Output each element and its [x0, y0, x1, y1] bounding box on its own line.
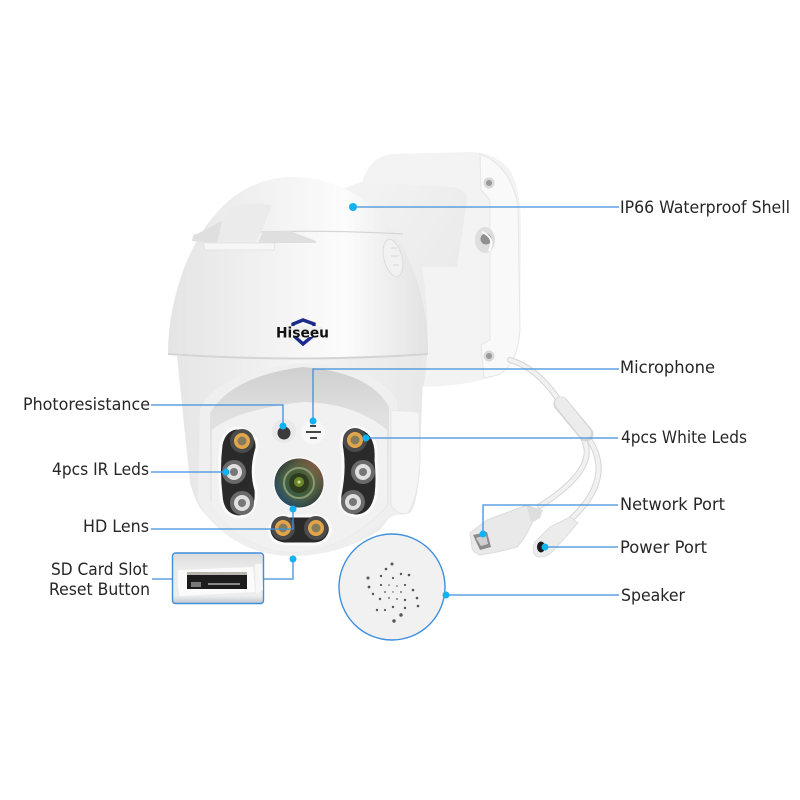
screw holes: [475, 178, 495, 362]
cables: [510, 360, 599, 520]
logo: [276, 320, 329, 344]
dome bottom rim: [168, 353, 428, 360]
leader: white LEDs: [362, 434, 618, 442]
branch to power port: [570, 438, 599, 520]
label: network port: Network Port: [620, 495, 726, 514]
camera body lower housing: [177, 356, 423, 556]
dome: [168, 177, 428, 360]
inner face plate: [212, 402, 387, 552]
label: HD lens: HD Lens: [83, 517, 149, 536]
leader: speaker: [442, 592, 619, 598]
label: IR LEDs: 4pcs IR Leds: [52, 460, 149, 479]
bracket back plate: [340, 152, 521, 387]
housing shell: [177, 356, 423, 556]
leader: microphone: [310, 369, 619, 424]
side flap: [391, 410, 420, 514]
labels: [23, 198, 790, 605]
leader: HD lens: [151, 506, 296, 529]
leader: IP66 shell: [349, 203, 619, 211]
label: power port: Power Port: [620, 538, 708, 557]
label: reset button: Reset Button: [49, 580, 150, 599]
main lens: [273, 457, 325, 509]
label: photoresistance: Photoresistance: [23, 395, 150, 414]
microphone grille: [301, 420, 325, 444]
bracket edge: [480, 154, 520, 378]
SD card inset: [172, 553, 264, 604]
dome seam: [194, 231, 403, 235]
main cable: [510, 360, 560, 402]
leader: photoresistance: [151, 405, 286, 430]
left IR LED panel: [220, 428, 257, 517]
leader: SD label: [152, 578, 172, 580]
leader: network port: [480, 505, 618, 538]
branch to network port: [540, 438, 587, 506]
label: microphone: Microphone: [620, 358, 715, 377]
leader: IR LEDs: [151, 468, 230, 476]
label: white LEDs: 4pcs White Leds: [621, 428, 747, 447]
cable splitter: [561, 404, 586, 434]
label: IP66: IP66 Waterproof Shell: [620, 198, 790, 217]
leader lines and dots: [151, 203, 619, 598]
leader: power port: [542, 544, 618, 550]
leader: SD card: [264, 556, 296, 579]
top handle: [217, 204, 272, 243]
photoresistance sensor: [272, 419, 296, 443]
bracket arm: [340, 182, 467, 385]
speaker holes: [366, 562, 419, 623]
recessed face: [210, 367, 389, 553]
right white LED panel: [340, 427, 377, 516]
speaker inset: [339, 534, 445, 640]
power port connector: [533, 517, 578, 557]
label: SD card slot: SD Card Slot: [51, 560, 148, 579]
network port connector: [470, 505, 543, 555]
label: speaker: Speaker: [621, 586, 685, 605]
bottom LED panel: [269, 516, 330, 544]
side vent: [380, 237, 406, 279]
outer face arch: [198, 363, 400, 556]
wall mount bracket: [340, 152, 521, 387]
logo: Hiseeu: [276, 326, 329, 342]
